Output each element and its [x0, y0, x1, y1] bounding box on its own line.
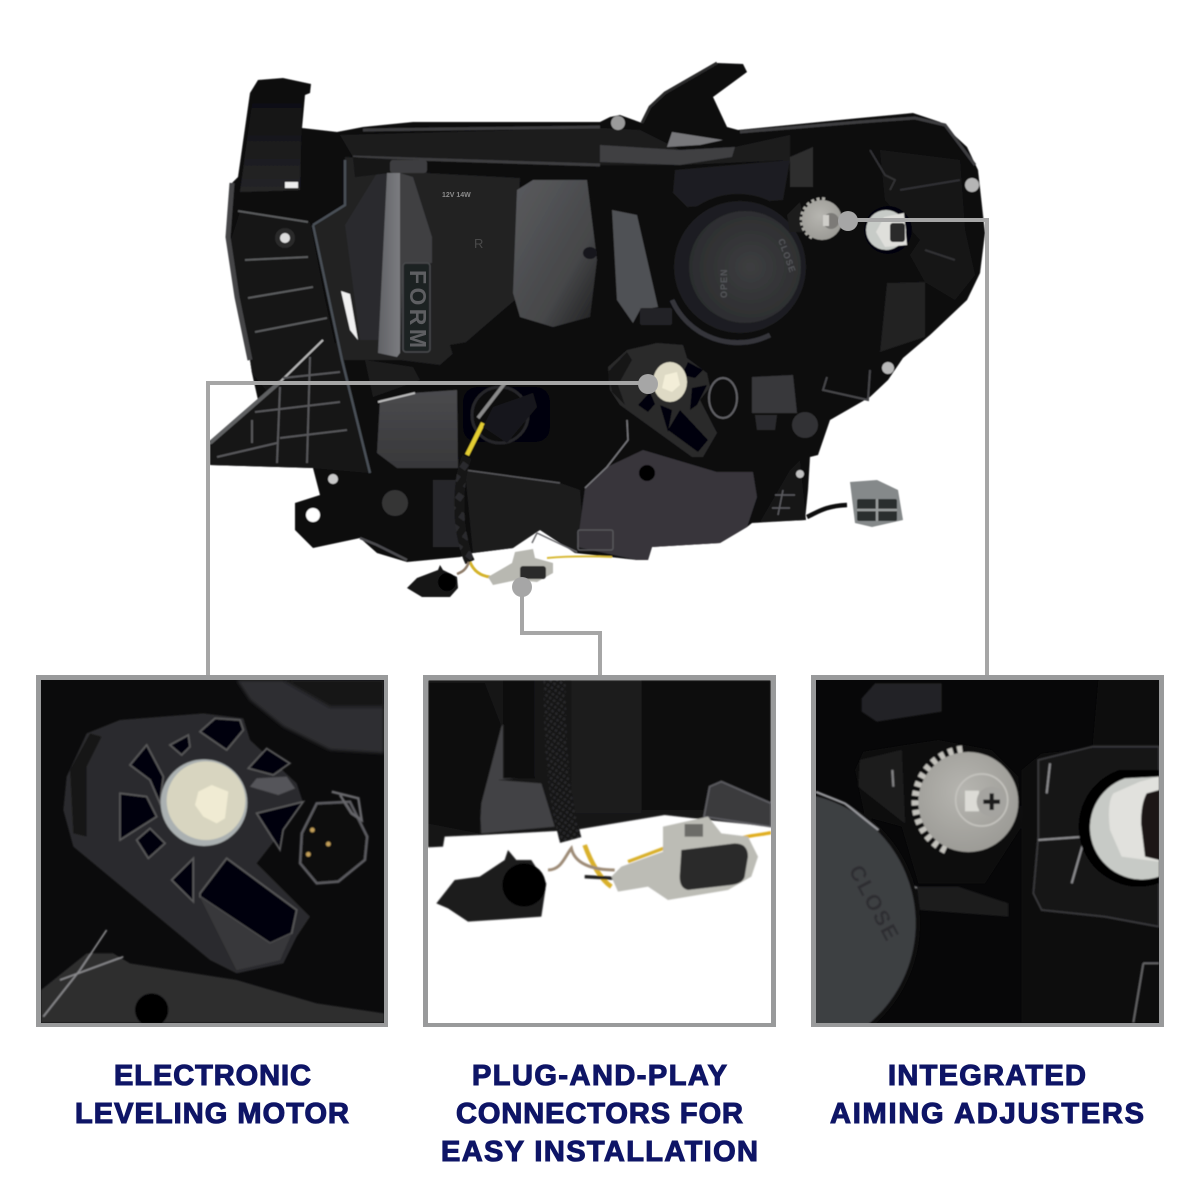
motor vents: [120, 718, 303, 943]
top rail band: [340, 128, 790, 165]
lower housing dark panels: [433, 480, 460, 547]
callout: leveling motor line: [208, 374, 658, 675]
caption: plug-and-play connectors: [441, 1060, 758, 1168]
bulb cavity: [450, 335, 560, 443]
central block: [513, 180, 597, 327]
caption: electronic leveling motor: ELECTRONIC: [114, 1060, 311, 1092]
ribbed left bracket: [228, 183, 335, 395]
upper gloss band: [600, 145, 735, 165]
connector socket: [1033, 747, 1159, 927]
adjuster socket: [855, 740, 1022, 883]
mounting screws: [611, 116, 979, 192]
caption: plug-and-play connectors: EASY INSTALLATION: [441, 1136, 758, 1168]
clear tab: [612, 210, 658, 323]
housing silhouette: [210, 63, 985, 562]
ribbed lower fin: [210, 340, 370, 473]
callout: connector line: [512, 577, 600, 675]
caption: integrated aiming adjusters: AIMING ADJUSTERS: [830, 1098, 1144, 1130]
lamp underside: [428, 680, 771, 847]
top bracket: [862, 683, 942, 722]
panel: plug-and-play connectors close-up: [423, 675, 776, 1027]
headlamp connector: [864, 206, 912, 254]
headlight rear photo: [210, 63, 985, 597]
leveling motor: [608, 343, 737, 457]
braided sleeve: [555, 680, 571, 840]
panel: integrated aiming adjusters close-up: [650, 675, 1164, 1058]
FORM logo text: FORM: [405, 270, 431, 348]
cap lettering: OPEN: [719, 268, 729, 298]
cap edge: [650, 788, 920, 1058]
caption: integrated aiming adjusters: INTEGRATED: [888, 1060, 1086, 1092]
lower housing plate: [577, 420, 757, 560]
right lower blocks: [752, 282, 925, 522]
motor connector: [300, 792, 367, 883]
lower ear details: [306, 474, 408, 560]
grey plug: [611, 817, 758, 900]
four-pin connector: [850, 480, 903, 527]
toothed adjuster gear: [916, 750, 1018, 852]
wiring harness: [457, 383, 847, 577]
cap lettering: CLOSE: [844, 861, 904, 946]
lower grey panel: [377, 390, 458, 468]
caption: plug-and-play connectors: PLUG-AND-PLAY: [472, 1060, 727, 1092]
wires: [548, 833, 771, 887]
motor body: [63, 713, 310, 973]
motor cream gear: [161, 759, 247, 846]
translucent lens housing: [313, 157, 520, 365]
dust cap: [664, 194, 812, 343]
caption: electronic leveling motor: LEVELING MOTOR: [75, 1098, 349, 1130]
dust cap: CLOSE: [776, 237, 798, 275]
caption: plug-and-play connectors: CONNECTORS FOR: [456, 1098, 743, 1130]
bottom plate: [41, 953, 384, 1023]
white label: [341, 291, 358, 340]
FORM strip: [378, 173, 400, 357]
callout: aiming adjuster line: [838, 211, 987, 675]
plug connector: [488, 549, 553, 585]
round connector: [436, 850, 546, 922]
R marking: R: [474, 236, 483, 251]
caption: electronic leveling motor: [75, 1060, 349, 1130]
wattage marking: 12V 14W: [442, 192, 471, 199]
aiming adjuster: [787, 199, 842, 240]
panel: electronic leveling motor close-up: [36, 675, 388, 1027]
round connector: [407, 565, 458, 597]
right bump: [673, 160, 790, 207]
background ring: [237, 680, 384, 753]
top tab interior: [240, 97, 302, 192]
adjuster lower ledge: [917, 887, 1008, 917]
caption: integrated aiming adjusters: [830, 1060, 1144, 1130]
